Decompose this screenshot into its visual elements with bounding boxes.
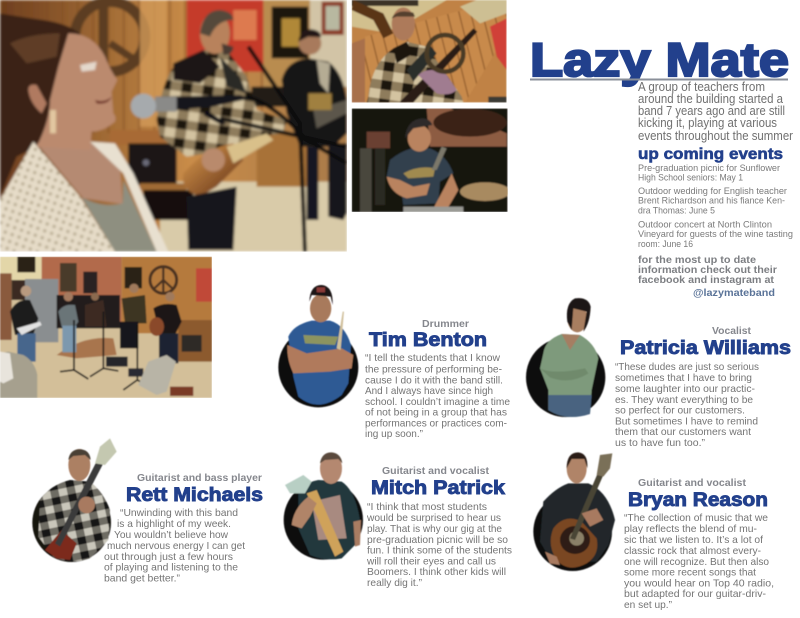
quote: Patricia Williams: us to have fun too.” [615, 437, 705, 449]
intro text block: around the building started a [638, 92, 783, 106]
quote: Patricia Williams: “These dudes are just so serious [615, 361, 759, 373]
name block: Tim Benton: Drummer [422, 319, 469, 330]
quote: Patricia Williams: some laughter into our practic- [615, 383, 755, 395]
quote: Patricia Williams: so perfect for our customers. [615, 404, 745, 416]
quote: Mitch Patrick: pre-graduation picnic will be so [367, 534, 508, 546]
quote: Tim Benton: ing up soon.” [365, 428, 423, 440]
quote: Tim Benton: the pressure of performing be- [365, 364, 502, 376]
mic stands [220, 47, 347, 252]
quote: Rett Michaels: much nervous energy I can get [107, 540, 245, 552]
portrait: Bryan Reason [533, 452, 615, 571]
vocalist top [82, 180, 157, 252]
quote: Mitch Patrick: play. That is why our gig at the [367, 523, 502, 535]
quote: Tim Benton: cause I do it with the band still. [365, 374, 503, 386]
events list: Outdoor wedding for English teacher [638, 186, 787, 197]
quote: Mitch Patrick: really dig it.” [367, 577, 422, 589]
quote: Bryan Reason: one will recognize. But then also [624, 556, 769, 568]
events list: Outdoor concert at North Clinton [638, 220, 772, 230]
quote: Rett Michaels: out through just a few hours [104, 551, 233, 563]
events list: Brent Richardson and his fiance Ken- [638, 196, 785, 206]
social media note: @lazymateband [693, 287, 775, 299]
quote: Bryan Reason: play reflects the blend of mu- [624, 523, 757, 535]
name block: Mitch Patrick [371, 466, 505, 499]
stands [60, 312, 150, 390]
name block: Rett Michaels [126, 473, 263, 506]
quote: Mitch Patrick: Boomers. I think other kids will [367, 566, 506, 578]
heading: up coming events: up coming events [638, 146, 783, 163]
vocalist hair [0, 13, 80, 197]
name block: Patricia Williams: Patricia Williams [620, 338, 791, 359]
quote: Rett Michaels: You wouldn’t believe how [114, 529, 228, 541]
microphone [157, 95, 250, 112]
band members [10, 300, 38, 335]
quote: Mitch Patrick: would be surprised to hear us [366, 512, 501, 524]
quote: Patricia Williams: sometimes that I have to bring [615, 372, 752, 384]
quote: Bryan Reason: classic rock that almost every- [624, 545, 761, 557]
quote: Rett Michaels: “Unwinding with this band [120, 507, 238, 519]
photo: drummer at the kit [352, 108, 510, 212]
name block: Bryan Reason: Guitarist and vocalist [638, 478, 747, 489]
photo: bass player close-up [352, 0, 507, 103]
social media note: for the most up to date [638, 254, 756, 266]
quote: Bryan Reason: en set up.” [624, 599, 672, 611]
events list: dra Thomas: June 5 [638, 206, 715, 216]
quote: Tim Benton: of not being in a group that has [365, 406, 507, 418]
name block: Tim Benton: Tim Benton [369, 330, 487, 351]
name block: Mitch Patrick: Mitch Patrick [371, 478, 505, 499]
events list: room: June 16 [638, 239, 693, 250]
vocalist neck and chest [37, 140, 123, 204]
quote: Mitch Patrick: will roll their eyes and call us [366, 556, 496, 568]
centre guitarist [157, 50, 287, 157]
name block: Rett Michaels: Guitarist and bass player [137, 473, 262, 484]
vocalist face [37, 33, 117, 150]
quote: Bryan Reason [624, 512, 774, 611]
quote: Rett Michaels: is a highlight of my week. [117, 518, 231, 530]
quote: Bryan Reason: but adapted for our guitar-driv- [624, 588, 767, 600]
quote: Tim Benton: And I always have since high [365, 385, 493, 397]
quote: Rett Michaels [104, 507, 245, 584]
intro text block: A group of teachers from [638, 80, 765, 94]
portrait: Rett Michaels [32, 438, 117, 562]
social media note: information check out their [638, 264, 777, 276]
quote: Bryan Reason: “The collection of music that we [624, 512, 768, 524]
intro text block [638, 80, 793, 143]
intro text block: band 7 years ago and are still [638, 104, 785, 118]
portrait: Mitch Patrick [284, 452, 363, 560]
intro text block: kicking it, playing at various [638, 116, 777, 130]
social media note [638, 254, 777, 299]
quote: Mitch Patrick: fun. I think some of the students [367, 544, 512, 556]
quote: Bryan Reason: sic that we listen to. It’s a lot of [624, 534, 763, 546]
quote: Bryan Reason: some more recent songs that [624, 566, 756, 578]
quote: Rett Michaels: band get better.” [104, 572, 180, 584]
name block: Patricia Williams: Vocalist [712, 326, 752, 337]
photo: vocalist and band performing [0, 0, 347, 252]
quote: Tim Benton: school. I couldn’t imagine a time [365, 396, 510, 408]
quote: Patricia Williams: them that our customers want [615, 426, 751, 438]
events list: Pre-graduation picnic for Sunflower [638, 163, 780, 174]
quote: Mitch Patrick: “I think that most students [367, 501, 487, 513]
portrait: Patricia Williams [526, 298, 605, 417]
quote: Tim Benton: performances or practices com- [365, 418, 507, 430]
name block: Tim Benton [369, 319, 487, 351]
social media note: facebook and instagram at [638, 274, 775, 286]
quote: Tim Benton [365, 352, 510, 440]
events list: Vineyard for guests of the wine tasting [638, 229, 793, 240]
name block: Patricia Williams [620, 326, 791, 359]
quote: Patricia Williams [615, 361, 759, 449]
title: Lazy Mate: Lazy Mate [530, 33, 789, 86]
quote: Rett Michaels: of playing and listening to the [104, 562, 238, 574]
portrait: Tim Benton [278, 285, 358, 407]
quote: Mitch Patrick [366, 501, 512, 589]
quote: Bryan Reason: you would hear on Top 40 radio, [624, 578, 774, 590]
quote: Patricia Williams: But sometimes I have to remind [615, 416, 758, 428]
events list: High School seniors: May 1 [638, 172, 743, 184]
name block: Mitch Patrick: Guitarist and vocalist [382, 466, 490, 477]
name block: Rett Michaels: Rett Michaels [126, 485, 263, 506]
right guitarist [282, 58, 347, 147]
quote: Tim Benton: “I tell the students that I know [365, 352, 500, 364]
quote: Patricia Williams: es. They want everything to be [615, 394, 753, 406]
name block: Bryan Reason [628, 478, 768, 511]
events list [638, 163, 793, 250]
photo: full band in the room [0, 257, 212, 398]
name block: Bryan Reason: Bryan Reason [628, 490, 768, 511]
